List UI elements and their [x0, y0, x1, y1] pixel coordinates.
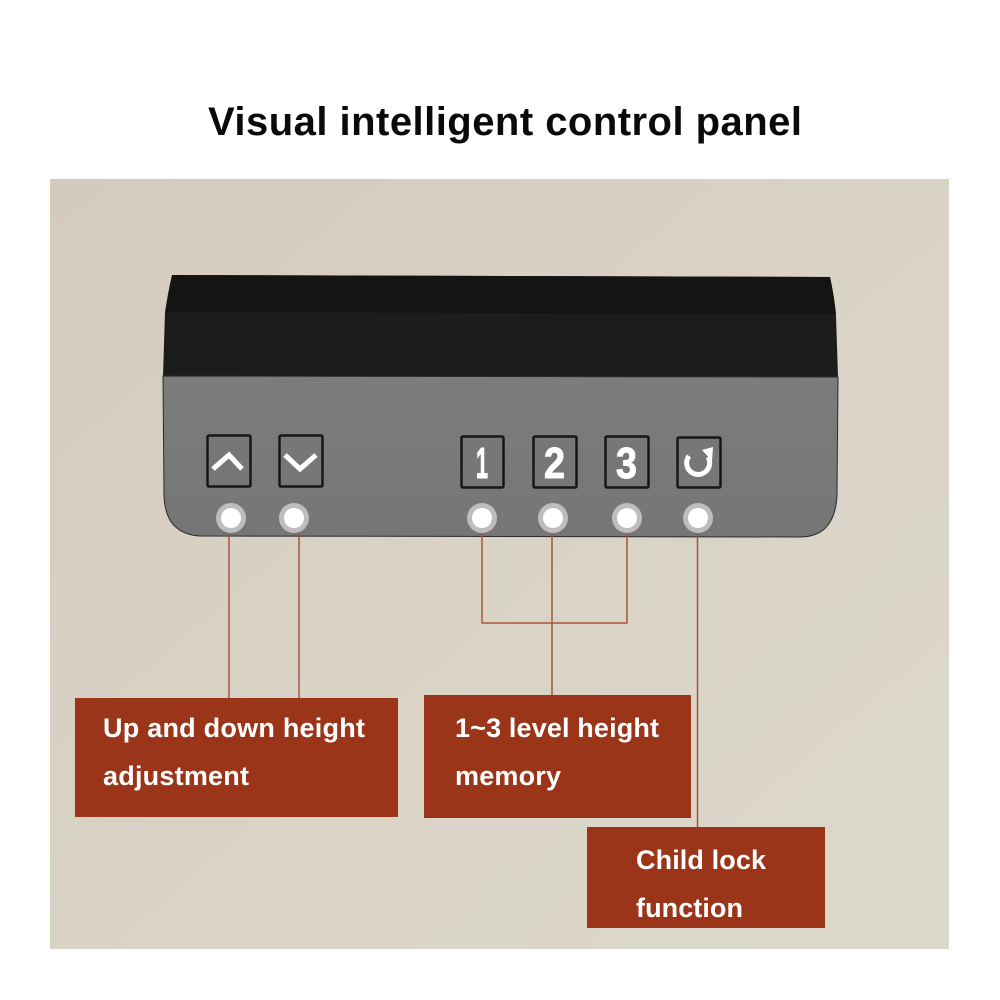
connector lines [229, 530, 698, 828]
callout: height memory [424, 695, 691, 818]
icon: up chevron [213, 455, 242, 469]
panel: beige wall background [50, 179, 949, 949]
digit 2: 2 [544, 439, 565, 488]
button: 3 [606, 436, 648, 488]
button: child lock [678, 438, 720, 488]
button: up [208, 436, 250, 486]
icon: down chevron [285, 455, 316, 469]
button: 1 [462, 436, 504, 488]
device grey face [163, 376, 838, 537]
digit 3: 3 [616, 439, 637, 488]
button: 2 [534, 436, 576, 488]
callout: height adjustment [75, 698, 398, 817]
callout: height adjustment: Up and down height [103, 713, 365, 743]
title: Visual intelligent control panel [208, 100, 802, 144]
control panel device [163, 275, 838, 537]
callout: height memory: memory [455, 761, 561, 791]
callout: child lock: function [636, 893, 743, 923]
callout: child lock [587, 827, 825, 928]
icon: rotate arrow [687, 447, 713, 474]
callout: height memory: 1~3 level height [455, 713, 659, 743]
button: 1: 1 [476, 439, 488, 488]
button: down [280, 436, 322, 486]
indicator dots [216, 503, 713, 533]
callout: height adjustment: adjustment [103, 761, 249, 791]
device dark top [163, 275, 838, 377]
callout: child lock: Child lock [636, 845, 767, 875]
